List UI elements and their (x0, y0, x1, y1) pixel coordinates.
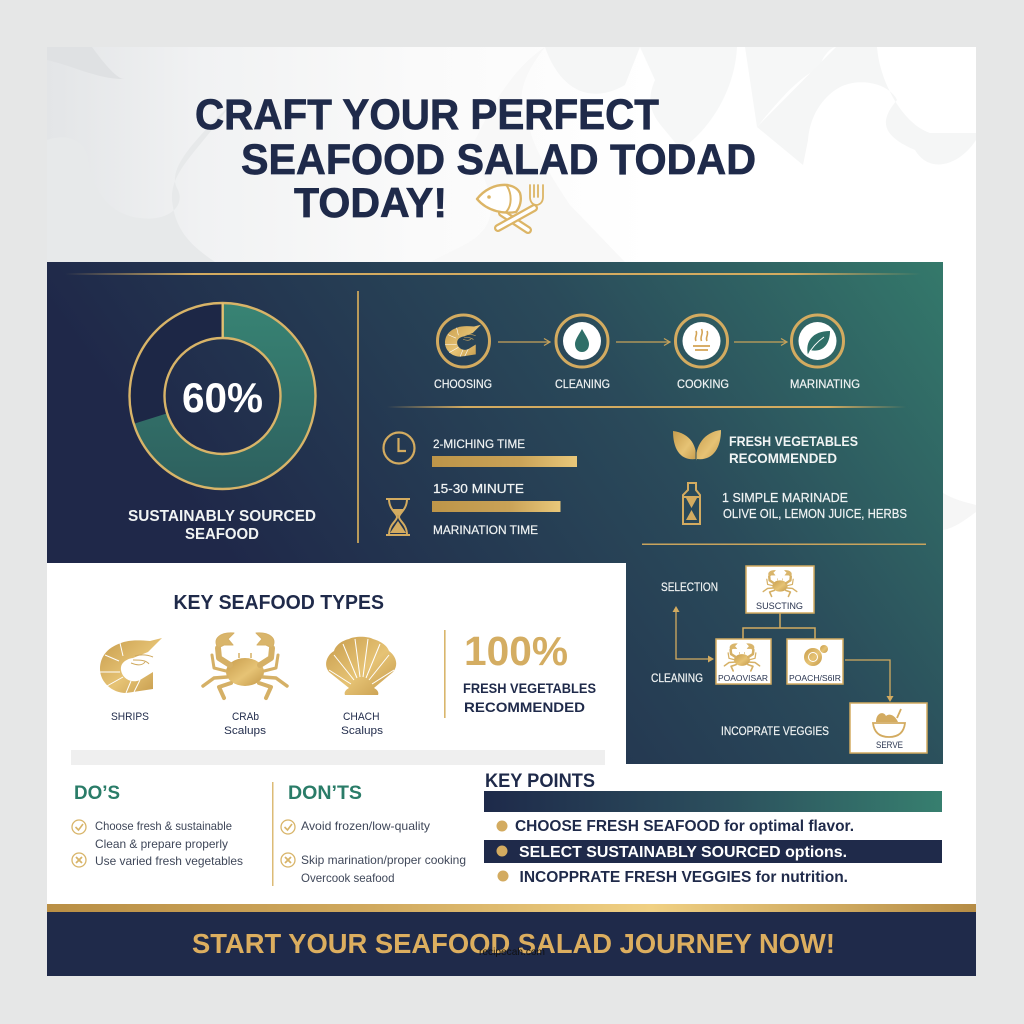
label: selection: SELECTION (661, 580, 718, 594)
label: crab: Scalups (224, 725, 267, 737)
do items: Choose fresh & sustainable (95, 819, 232, 833)
flowchart (651, 566, 927, 753)
timing bar: marination: MARINATION TIME (433, 523, 538, 537)
title: CRAFT YOUR PERFECT (195, 91, 659, 139)
box: poach or sear: POAOVISAR (718, 673, 768, 683)
divider vertical (357, 291, 359, 543)
step: choosing: CHOOSING (434, 377, 492, 391)
callout: fresh vegetables: RECOMMENDED (729, 450, 837, 466)
heading: KEY POINTS (485, 771, 595, 792)
title: TODAY! (294, 179, 447, 226)
top gold rule (65, 273, 921, 275)
donut caption: SEAFOOD (185, 526, 259, 543)
chart: 60 percent donut (130, 303, 316, 489)
key point 1: CHOOSE FRESH SEAFOOD for optimal flavor. (515, 818, 854, 835)
icon: crab (203, 633, 287, 698)
do items (95, 819, 243, 868)
callout: simple marinade: 1 SIMPLE MARINADE (722, 491, 848, 505)
icon: cross (72, 853, 86, 867)
panel: key seafood types (100, 592, 596, 737)
arrow (498, 338, 550, 346)
title: SEAFOOD SALAD TODAD (241, 136, 756, 184)
box: selecting (746, 566, 814, 613)
step: cleaning: CLEANING (555, 377, 610, 391)
icon: leaves (673, 430, 721, 462)
icon: clock (384, 432, 414, 464)
step: cleaning (555, 315, 610, 391)
label: crab (224, 711, 267, 737)
grey strip (71, 750, 605, 765)
label: cleaning: CLEANING (651, 671, 703, 685)
title (195, 91, 756, 226)
label: chach: Scalups (341, 725, 384, 737)
don't items (301, 819, 466, 885)
label: shrimp: SHRIPS (111, 711, 149, 723)
heading: KEY SEAFOOD TYPES (174, 592, 384, 614)
panel: key points (484, 771, 942, 886)
icon: scallop shell (326, 637, 396, 695)
donut caption: SUSTAINABLY SOURCED (128, 508, 316, 525)
arrow: selection to cleaning (672, 606, 714, 662)
timing bar: marination (432, 482, 560, 537)
icon: check (281, 820, 295, 834)
gradient bar (484, 791, 942, 812)
divider (272, 782, 274, 886)
icon: fish and fork (477, 185, 543, 230)
box: poach or stir (787, 639, 843, 684)
step: cooking (676, 315, 729, 391)
step: choosing (434, 315, 492, 391)
label: chach: CHACH (343, 711, 380, 723)
call to action: START YOUR SEAFOOD SALAD JOURNEY NOW! (192, 928, 835, 959)
panel: dark process panel (47, 262, 943, 764)
icon: cross (281, 853, 295, 867)
watermark: recipecah.com (479, 946, 545, 958)
heading: don'ts: DON’TS (288, 783, 362, 804)
icon: marinade bottle (683, 483, 700, 524)
icon: hourglass (386, 499, 410, 535)
panel: don'ts (281, 783, 466, 885)
don't items: Avoid frozen/low-quality (301, 819, 430, 833)
step: marinating (790, 315, 860, 391)
step: cooking: COOKING (677, 377, 729, 391)
arrow (616, 338, 670, 346)
callout: fresh vegetables: FRESH VEGETABLES (729, 433, 858, 449)
don't items: Overcook seafood (301, 871, 394, 885)
label: crab: CRAb (232, 711, 259, 723)
callout: simple marinade: OLIVE OIL, LEMON JUICE, HERBS (723, 507, 907, 521)
box: serve (850, 703, 927, 753)
callout: fresh vegetables (729, 433, 858, 466)
donut value: 60% (182, 374, 263, 421)
don't items: Skip marination/proper cooking (301, 853, 466, 867)
stat caption: FRESH VEGETABLES (463, 680, 596, 696)
heading: do's: DO’S (74, 783, 120, 804)
stat caption: RECOMMENDED (464, 699, 585, 715)
process flow steps (434, 315, 860, 391)
timing bar: prep: 2-MICHING TIME (433, 437, 525, 451)
donut caption (128, 508, 316, 543)
lower gold rule (642, 544, 926, 545)
label: chach (341, 711, 384, 737)
panel: do's (72, 783, 243, 868)
icon: check (72, 820, 86, 834)
box: selecting: SUSCTING (756, 601, 803, 611)
stat: 100 percent: 100% (464, 628, 568, 674)
arrow (734, 338, 787, 346)
do items: Clean & prepare properly (95, 837, 228, 851)
arrow: to serve (845, 660, 894, 702)
middle gold rule (387, 406, 906, 408)
key point 3: INCOPPRATE FRESH VEGGIES for nutrition. (520, 869, 848, 886)
callout: simple marinade (722, 491, 907, 521)
label: incorporate veggies: INCOPRATE VEGGIES (721, 724, 829, 738)
box: poach or stir: POACH/S6IR (789, 673, 841, 683)
box: serve: SERVE (876, 740, 903, 751)
key point 2 (484, 840, 942, 863)
footer banner (47, 904, 976, 976)
divider (444, 630, 446, 718)
stat caption (463, 680, 596, 715)
timing bar: prep (432, 437, 577, 467)
timing bar: marination: 15-30 MINUTE (433, 482, 524, 496)
icon: shrimp (100, 638, 162, 693)
box: poach or sear (716, 639, 771, 684)
key point 2: SELECT SUSTAINABLY SOURCED options. (519, 844, 847, 861)
connectors (743, 613, 815, 639)
step: marinating: MARINATING (790, 377, 860, 391)
do items: Use varied fresh vegetables (95, 854, 243, 868)
